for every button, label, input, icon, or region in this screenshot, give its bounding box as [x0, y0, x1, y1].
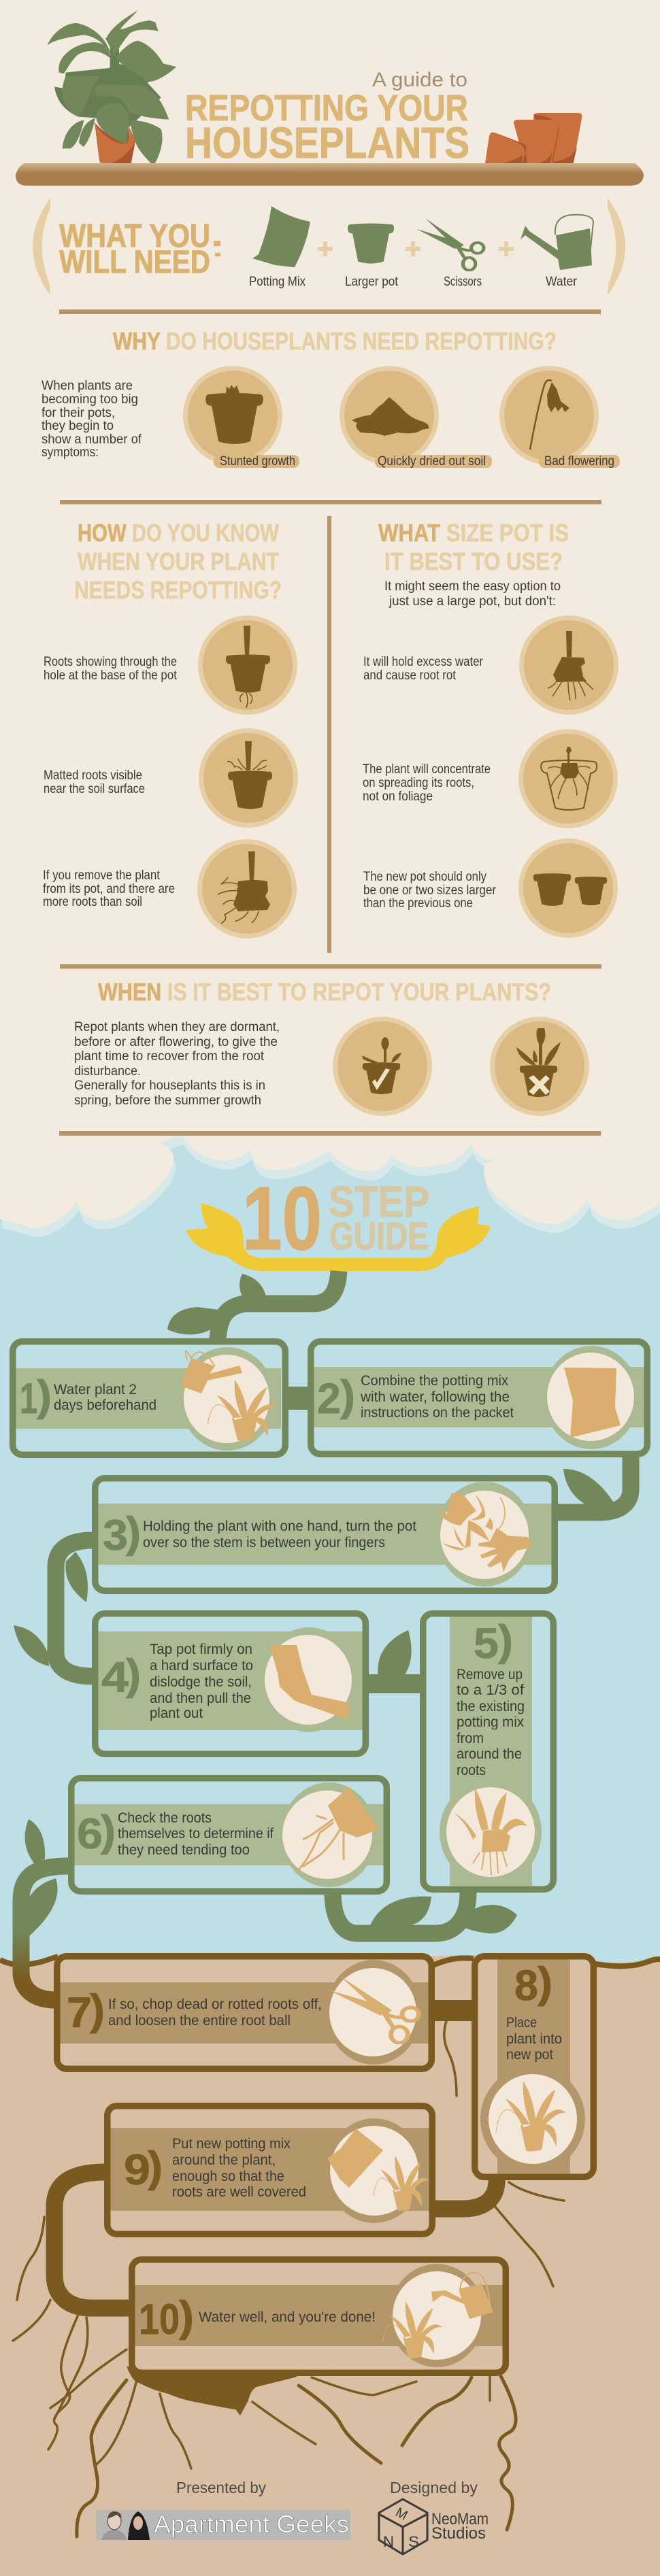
title line 1: REPOTTING YOUR: [185, 88, 468, 129]
step text: and loosen the entire root ball: [108, 2013, 291, 2029]
paren: ): [126, 1651, 141, 1699]
step text: Water well, and you're done!: [199, 2309, 376, 2325]
item: more roots than soil: [43, 839, 297, 938]
body text: [74, 1020, 280, 1108]
step text: and then pull the: [150, 1691, 251, 1706]
step text: to a 1/3 of: [457, 1682, 524, 1698]
step text: a hard surface to: [150, 1658, 253, 1674]
item: matted roots: near the soil surface: [44, 782, 145, 796]
vine from banner to step 1: [167, 1271, 339, 1340]
body text: before or after flowering, to give the: [74, 1035, 278, 1049]
intro text: symptoms:: [42, 445, 99, 460]
heading line 2: IT BEST TO USE?: [384, 547, 563, 575]
step text: instructions on the packet: [361, 1405, 514, 1421]
panel: step 8: [475, 1956, 593, 2177]
heading: when: WHEN IS IT BEST TO REPOT YOUR PLANTS?: [98, 978, 551, 1006]
vine: step 5 to step 6: [333, 1893, 517, 1933]
badge: step 5 image: [440, 1779, 542, 1885]
step text: from: [457, 1731, 484, 1746]
item: concentrate on roots: [363, 729, 618, 828]
panel: what size pot: [363, 519, 618, 938]
badge: step 4 image: [261, 1627, 357, 1732]
item: one or two sizes larger: [363, 838, 618, 938]
step text: potting mix: [457, 1714, 524, 1730]
body text: Generally for houseplants this is in: [74, 1079, 265, 1093]
step text: Put new potting mix: [172, 2136, 291, 2152]
icon: scissors: [416, 218, 484, 270]
header: title and shelf: [16, 10, 644, 186]
intro text: becoming too big: [42, 392, 138, 407]
item: roots through base: Roots showing through the: [44, 655, 177, 669]
paren: ): [126, 1509, 141, 1557]
number 10: 10: [242, 1168, 322, 1268]
item: roots through base: hole at the base of the pot: [44, 668, 178, 683]
paren: ): [37, 1372, 52, 1420]
roots: [13, 2182, 564, 2537]
symptom: bad flowering: [499, 366, 620, 469]
badge: step 1 image: [180, 1347, 278, 1451]
item: concentrate on roots: The plant will concentrate: [363, 762, 491, 777]
icon: watering can: [521, 215, 593, 270]
item: concentrate on roots: on spreading its roots,: [363, 776, 474, 790]
item: more roots than soil: If you remove the plant: [43, 868, 161, 883]
panel: how do you know: [43, 519, 298, 938]
badge: step 8 image: [480, 2066, 585, 2172]
step text: over so the stem is between your fingers: [143, 1535, 385, 1550]
paren: ): [148, 2143, 163, 2191]
connector: step 7 to step 8: [433, 2000, 478, 2021]
icon: good time pot with check: [333, 1017, 432, 1116]
paren: ): [340, 1372, 355, 1420]
step text: around the plant,: [172, 2152, 276, 2168]
heading line 2: WILL NEED: [59, 243, 210, 279]
step text: [150, 1642, 253, 1721]
intro text: [384, 579, 561, 609]
item: excess water: [363, 615, 618, 715]
label: presented by: Presented by: [176, 2479, 266, 2496]
sky-side vine overdraw: stem through ground: [21, 1938, 56, 2000]
body text: spring, before the summer growth: [74, 1094, 261, 1108]
plus 2: [406, 241, 420, 256]
panel: step 7: [57, 1956, 431, 2069]
panel: step 1: [13, 1342, 285, 1455]
step number: 5: [474, 1620, 499, 1667]
logo: neomam studios: NeoMam: [431, 2510, 489, 2528]
symptom: bad flowering: Bad flowering: [544, 454, 614, 469]
icon: potting mix bag: [252, 206, 310, 267]
step number: 9: [124, 2146, 150, 2194]
step text: If so, chop dead or rotted roots off,: [108, 1997, 322, 2012]
heading line 2: WHEN YOUR PLANT: [78, 547, 279, 575]
symptom: stunted growth: [183, 366, 299, 469]
step text: new pot: [506, 2047, 553, 2063]
symptom: stunted growth: Stunted growth: [220, 454, 295, 469]
word guide: GUIDE: [329, 1215, 429, 1258]
panel: when to repot: [74, 978, 589, 1116]
step text: [143, 1519, 416, 1550]
step text: Tap pot firmly on: [150, 1642, 252, 1657]
yellow banner: [186, 1203, 491, 1271]
badge: step 2 image: [544, 1346, 639, 1449]
item: one or two sizes larger: The new pot should only: [363, 870, 486, 884]
intro text: [42, 379, 142, 460]
item: matted roots: Matted roots visible: [44, 768, 142, 783]
vine: step 9 to step 10: [54, 2172, 131, 2308]
step text: themselves to determine if: [118, 1826, 274, 1842]
step text: [506, 2015, 562, 2063]
panel: step 4: [95, 1614, 365, 1754]
cloud edge tint: [0, 1131, 660, 1237]
paren: ): [538, 1959, 552, 2007]
icon: bad time pot with cross: [490, 1017, 589, 1116]
title line 2: HOUSEPLANTS: [185, 118, 469, 167]
intro text: just use a large pot, but don't:: [389, 594, 556, 609]
colon: [214, 241, 220, 256]
panel: step 2: [311, 1342, 648, 1454]
step text: dislodge the soil,: [150, 1674, 252, 1690]
step text: [172, 2136, 306, 2200]
step text: plant into: [506, 2031, 562, 2047]
plus 1: [318, 241, 333, 256]
label: larger pot: Larger pot: [345, 275, 399, 289]
paren: ): [101, 1808, 116, 1855]
step text: Place: [506, 2015, 537, 2031]
logo: apartment geeks: [96, 2510, 350, 2540]
panel: step 3: [95, 1478, 555, 1591]
body text: plant time to recover from the root: [74, 1049, 265, 1064]
badge: step 7 image: [326, 1960, 421, 2065]
heading: why: WHY DO HOUSEPLANTS NEED REPOTTING?: [113, 327, 557, 355]
vine: step 3 to step 4: [14, 1540, 93, 1676]
step number: 4: [101, 1654, 129, 1701]
step text: Water plant 2: [54, 1382, 137, 1397]
item: roots through base: [44, 615, 297, 715]
step text: [457, 1667, 525, 1778]
step text: enough so that the: [172, 2169, 284, 2184]
step number: 8: [514, 1962, 538, 2010]
label: designed by: Designed by: [390, 2479, 478, 2496]
logo: neomam studios: [379, 2499, 489, 2554]
vine: step 6 to step 7: [21, 1819, 69, 2000]
ground with surface line: [0, 1954, 660, 2576]
label: water: Water: [546, 275, 578, 289]
heading: 10 step guide: [186, 1168, 491, 1271]
item: more roots than soil: more roots than soil: [43, 895, 142, 909]
word step: STEP: [329, 1177, 429, 1226]
badge: step 9 image: [326, 2118, 429, 2223]
heading line 3: NEEDS REPOTTING?: [74, 576, 282, 604]
step text: [108, 1997, 322, 2029]
step number: 7: [67, 1989, 92, 2037]
badge: step 10 image: [382, 2264, 493, 2367]
step number: 6: [77, 1810, 103, 1858]
logo: neomam studios: N: [383, 2533, 394, 2550]
panel: why repot: [42, 327, 620, 469]
logo: neomam studios: S: [408, 2533, 419, 2550]
right bracket: [608, 198, 625, 295]
step text: the existing: [457, 1699, 525, 1714]
item: excess water: It will hold excess water: [363, 655, 484, 669]
logo: neomam studios: Studios: [431, 2524, 486, 2543]
intro text: for their pots,: [42, 406, 115, 420]
sky background: [0, 1136, 660, 1979]
connector: step 4 to step 5: [368, 1630, 421, 1693]
cloud: [0, 1122, 660, 1228]
panel: step 10: [132, 2260, 506, 2373]
step text: with water, following the: [360, 1389, 510, 1405]
logo: neomam studios: M: [393, 2505, 410, 2524]
step number: 2: [317, 1375, 341, 1423]
item: excess water: and cause root rot: [363, 668, 457, 683]
step number: 1: [20, 1375, 37, 1423]
vine: step 8 to step 9: [435, 2180, 497, 2209]
illustration: potted plant: [47, 10, 176, 167]
shelf: [16, 163, 644, 186]
step text: days beforehand: [54, 1397, 156, 1413]
panel: step 5: [423, 1614, 553, 1889]
step text: Combine the potting mix: [361, 1373, 508, 1389]
body text: disturbance.: [74, 1064, 141, 1079]
step text: Remove up: [457, 1667, 523, 1682]
panel: step 6: [71, 1778, 386, 1891]
heading line 1: HOW DO YOU KNOW: [78, 519, 279, 547]
step text: [54, 1382, 156, 1413]
step number: 3: [103, 1512, 128, 1559]
plus 3: [499, 241, 514, 256]
paren: ): [90, 1986, 105, 2034]
label: potting mix: Potting Mix: [249, 275, 306, 289]
text: a guide to: A guide to: [372, 69, 467, 91]
step text: Check the roots: [118, 1810, 212, 1826]
intro text: show a number of: [42, 433, 142, 447]
item: matted roots: [44, 728, 298, 828]
footer: presented by: [96, 2479, 489, 2554]
symptom: quickly dried out soil: [340, 366, 492, 469]
step text: Holding the plant with one hand, turn the pot: [143, 1519, 416, 1534]
vine: step 2 to step 3: [555, 1457, 631, 1512]
label: scissors: Scissors: [444, 275, 482, 289]
symptom: quickly dried out soil: Quickly dried out soil: [378, 454, 486, 469]
paren: ): [179, 2293, 194, 2341]
step text: [118, 1810, 274, 1858]
intro text: When plants are: [42, 379, 133, 393]
left bracket: [33, 198, 50, 295]
item: concentrate on roots: not on foliage: [363, 790, 433, 804]
step text: roots are well covered: [172, 2184, 306, 2200]
badge: step 6 image: [281, 1782, 379, 1887]
heading line 1: WHAT SIZE POT IS: [378, 519, 569, 547]
badge: step 3 image: [436, 1482, 533, 1587]
step number: 10: [139, 2296, 180, 2343]
connector: step 1 to step 2: [288, 1387, 308, 1410]
step text: [360, 1373, 514, 1421]
heading: what you will need: WHAT YOU: [59, 218, 210, 254]
intro text: they begin to: [42, 419, 114, 433]
logo: apartment geeks: Apartment Geeks: [154, 2510, 349, 2538]
panel: what you will need: [33, 198, 625, 295]
icon: larger pot: [348, 224, 394, 264]
step text: around the: [457, 1746, 522, 1762]
step text: they need tending too: [118, 1842, 250, 1858]
illustration: stacked terracotta pots: [485, 113, 582, 167]
item: more roots than soil: from its pot, and there are: [43, 882, 175, 896]
step text: plant out: [150, 1706, 203, 1721]
panel: step 9: [108, 2106, 432, 2234]
intro text: It might seem the easy option to: [384, 579, 561, 594]
item: one or two sizes larger: be one or two sizes larger: [363, 883, 497, 898]
step text: roots: [457, 1763, 486, 1778]
body text: Repot plants when they are dormant,: [74, 1020, 280, 1034]
root from connector: [444, 2021, 457, 2096]
paren: ): [498, 1617, 513, 1665]
item: one or two sizes larger: than the previous one: [363, 896, 473, 911]
